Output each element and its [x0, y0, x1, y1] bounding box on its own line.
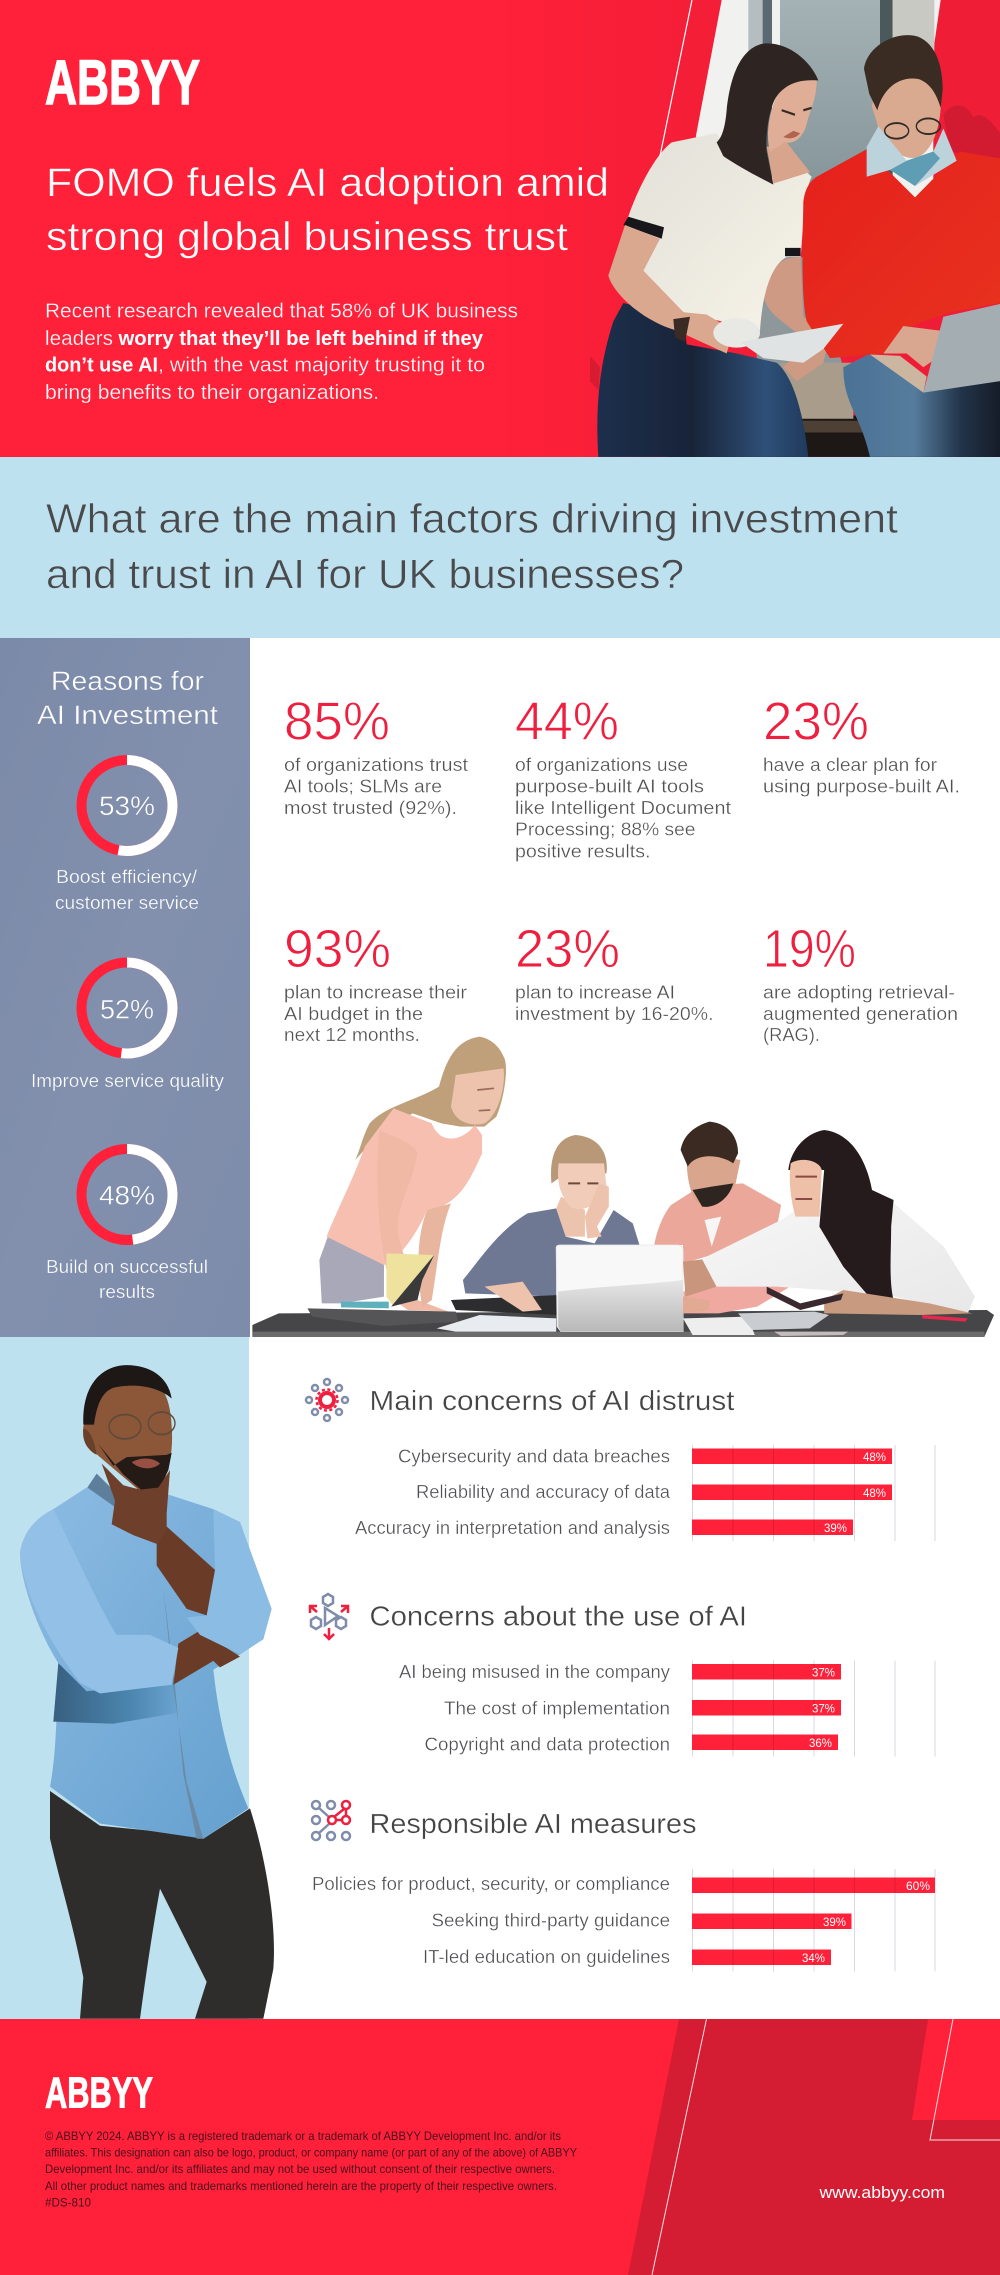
stat: 93%: 93%	[284, 919, 391, 979]
icon: play with hexagons	[310, 1594, 348, 1639]
sidebar heading: AI Investment	[37, 700, 219, 730]
heading: Concerns about the use of AI	[370, 1600, 747, 1632]
bar chart: distrust	[355, 1445, 935, 1541]
legal text	[45, 2129, 577, 2210]
website: www.abbyy.com	[818, 2183, 945, 2202]
left sleeve	[20, 1509, 178, 1693]
legal text: #DS-810	[45, 2196, 91, 2210]
stat: 93%: AI budget in the	[284, 1003, 423, 1024]
stat: 85%: of organizations trust	[284, 754, 468, 775]
man: hair	[864, 35, 943, 110]
stat: 19%: are adopting retrieval-	[763, 982, 955, 1002]
stat: 44%: like Intelligent Document	[515, 797, 731, 818]
gap behind people	[757, 257, 843, 367]
bar chart: use of AI: Copyright and data protection	[424, 1734, 670, 1754]
right woman: blouse	[700, 1197, 975, 1313]
stat: 93%: next 12 months.	[284, 1024, 420, 1045]
title: strong global business trust	[46, 215, 568, 259]
sidebar heading	[37, 666, 219, 730]
man: collar	[867, 126, 957, 186]
man: jeans	[843, 354, 1000, 457]
stat: 23% investment: plan to increase AI	[515, 982, 675, 1002]
bar chart: responsible AI	[312, 1869, 935, 1972]
notebook	[386, 1253, 434, 1307]
stat: 23% clear plan: using purpose-built AI.	[763, 776, 960, 796]
intro paragraph: Recent research revealed that 58% of UK business	[45, 300, 518, 322]
panel: footer	[0, 2019, 1000, 2275]
bar chart: use of AI: 37%	[812, 1704, 835, 1716]
stat: 85%: 85%	[284, 692, 390, 752]
bar chart: use of AI: The cost of implementation	[444, 1698, 670, 1718]
bar chart: distrust: Cybersecurity and data breaches	[398, 1446, 670, 1466]
bar chart: responsible AI: 60%	[906, 1881, 930, 1893]
head	[83, 1370, 172, 1494]
lower forearm	[173, 1631, 240, 1685]
man: sweater	[802, 149, 1000, 358]
label: boost efficiency: customer service	[55, 892, 199, 913]
photo: thinking man in a blue shirt	[20, 1365, 274, 2019]
legal text: affiliates. This designation can also be logo, product, or company name (or part of any of the above) of ABBYY	[45, 2146, 577, 2160]
forearm	[157, 1526, 215, 1615]
label: build on successful results	[46, 1256, 208, 1302]
title	[46, 161, 609, 259]
sidebar heading: Reasons for	[51, 666, 204, 696]
heading: Responsible AI measures	[370, 1808, 696, 1839]
closed laptop	[307, 1308, 458, 1326]
right sleeve	[187, 1509, 272, 1654]
bar chart: responsible AI: 34%	[802, 1953, 825, 1965]
stat: 85%: most trusted (92%).	[284, 797, 457, 818]
intro paragraph	[45, 300, 518, 404]
question heading	[46, 496, 899, 597]
label: build on successful results: Build on successful	[46, 1256, 208, 1277]
bar chart: use of AI: 36%	[809, 1738, 832, 1750]
paper and cup	[713, 318, 760, 348]
icon: connected nodes	[312, 1801, 350, 1840]
bar chart: responsible AI: Seeking third-party guidance	[432, 1910, 670, 1930]
bar chart: use of AI: AI being misused in the company	[399, 1662, 670, 1682]
bar chart: distrust: Reliability and accuracy of data	[416, 1482, 671, 1502]
question heading: What are the main factors driving investment	[46, 496, 899, 542]
intro paragraph: don’t use AI	[45, 354, 158, 376]
bar chart: distrust: Accuracy in interpretation and analysis	[355, 1518, 670, 1538]
label: improve service quality: Improve service quality	[31, 1070, 225, 1091]
stat: 44%: Processing; 88% see	[515, 818, 696, 840]
standing woman: hair back	[355, 1037, 506, 1160]
photo: two colleagues with a laptop	[590, 0, 1000, 457]
stat: 93%	[284, 919, 467, 1045]
panel: white stats background	[250, 638, 1000, 1337]
collar	[87, 1474, 115, 1507]
right woman: hair and face	[788, 1130, 894, 1300]
stat: 44%: 44%	[515, 692, 619, 752]
bar chart: distrust: 39%	[824, 1523, 847, 1535]
photo: team around a laptop	[252, 1037, 994, 1337]
bar chart: responsible AI: Policies for product, security, or compliance	[312, 1874, 670, 1894]
title: FOMO fuels AI adoption amid	[46, 161, 609, 205]
small book and hand	[824, 1290, 972, 1315]
man: face	[872, 71, 941, 158]
stat: 23% clear plan: have a clear plan for	[763, 754, 937, 775]
bar chart: responsible AI: IT-led education on guidelines	[423, 1947, 670, 1967]
stat: 23% investment	[515, 919, 714, 1024]
panel: question band	[0, 457, 1000, 638]
bar chart: responsible AI: 39%	[823, 1917, 846, 1929]
panel: hero banner	[0, 0, 1000, 457]
logo: ABBYY	[45, 48, 200, 118]
standing woman: top	[327, 1108, 482, 1265]
stat: 85%: AI tools; SLMs are	[284, 776, 442, 796]
section: concerns about the use of AI	[310, 1594, 935, 1756]
donut: 52%: 52%	[100, 994, 154, 1024]
stat: 44%	[515, 692, 731, 862]
decorative white line	[660, 0, 692, 156]
legal text: © ABBYY 2024. ABBYY is a registered trademark or a trademark of ABBYY Development Inc. and/or its	[45, 2129, 561, 2143]
woman: jeans	[597, 303, 808, 457]
woman: far arm	[763, 257, 830, 381]
stat: 23% clear plan	[763, 692, 960, 796]
donut: 48%	[82, 1149, 172, 1240]
legal text: All other product names and trademarks mentioned herein are the property of their respective owners.	[45, 2179, 557, 2193]
donut: 48%: 48%	[99, 1180, 155, 1210]
standing woman: pants	[319, 1233, 384, 1303]
label: build on successful results: results	[99, 1281, 155, 1302]
seated woman: face	[551, 1135, 607, 1183]
man: shirt and head	[654, 1183, 781, 1263]
standing woman: face	[451, 1068, 504, 1124]
heading: Main concerns of AI distrust	[370, 1385, 735, 1416]
stat: 44%: positive results.	[515, 840, 650, 862]
stat: 23% investment: investment by 16-20%.	[515, 1003, 714, 1024]
stat: 44%: purpose-built AI tools	[515, 776, 704, 796]
intro paragraph: bring benefits to their organizations.	[45, 382, 379, 404]
section: main concerns of AI distrust	[306, 1379, 935, 1541]
stat: 19%: (RAG).	[763, 1024, 820, 1045]
bench	[667, 416, 1000, 457]
standing woman: arms	[377, 1130, 449, 1312]
stat: 85%	[284, 692, 468, 818]
label: boost efficiency: Boost efficiency/	[56, 866, 198, 887]
table	[252, 1310, 994, 1337]
icon: gear with nodes	[306, 1379, 348, 1421]
legal text: Development Inc. and/or its affiliates and may not be used without consent of their respective owners.	[45, 2162, 555, 2176]
woman: near arm	[608, 225, 733, 354]
bar chart: use of AI	[399, 1660, 935, 1756]
donut: 53%: 53%	[99, 791, 155, 821]
seated woman: dress	[463, 1208, 640, 1297]
label: boost efficiency	[55, 866, 199, 913]
bar chart: distrust: 48%	[863, 1488, 886, 1500]
stat: 19%: augmented generation	[763, 1003, 958, 1024]
intro paragraph: leaders	[45, 328, 113, 350]
woman: neck and face	[767, 142, 810, 184]
intro paragraph: , with the vast majority trusting it to	[158, 354, 485, 376]
stat: 44%: of organizations use	[515, 754, 688, 775]
bar chart: distrust: 48%	[863, 1452, 886, 1464]
hand	[102, 1464, 170, 1544]
question heading: and trust in AI for UK businesses?	[46, 551, 684, 597]
panel: reasons for AI investment	[0, 638, 250, 1337]
stat: 19%: 19%	[763, 919, 856, 979]
stat: 93%: plan to increase their	[284, 982, 467, 1002]
stat: 19%	[763, 919, 958, 1045]
woman: tee	[625, 133, 812, 331]
stat: 23% clear plan: 23%	[763, 692, 869, 752]
papers on table	[437, 1315, 556, 1332]
torso	[20, 1487, 270, 1839]
footer logo: ABBYY	[45, 2068, 153, 2118]
section: responsible AI measures	[312, 1801, 935, 1972]
intro paragraph: worry that they’ll be left behind if they	[117, 328, 484, 350]
panel: concerns background	[0, 1337, 1000, 2019]
man: laptop and hand	[870, 354, 927, 393]
bar chart: use of AI: 37%	[812, 1668, 835, 1680]
laptop	[556, 1245, 683, 1332]
stat: 23% investment: 23%	[515, 919, 620, 979]
donut: 52%	[82, 962, 172, 1054]
donut: 53%	[82, 760, 172, 851]
